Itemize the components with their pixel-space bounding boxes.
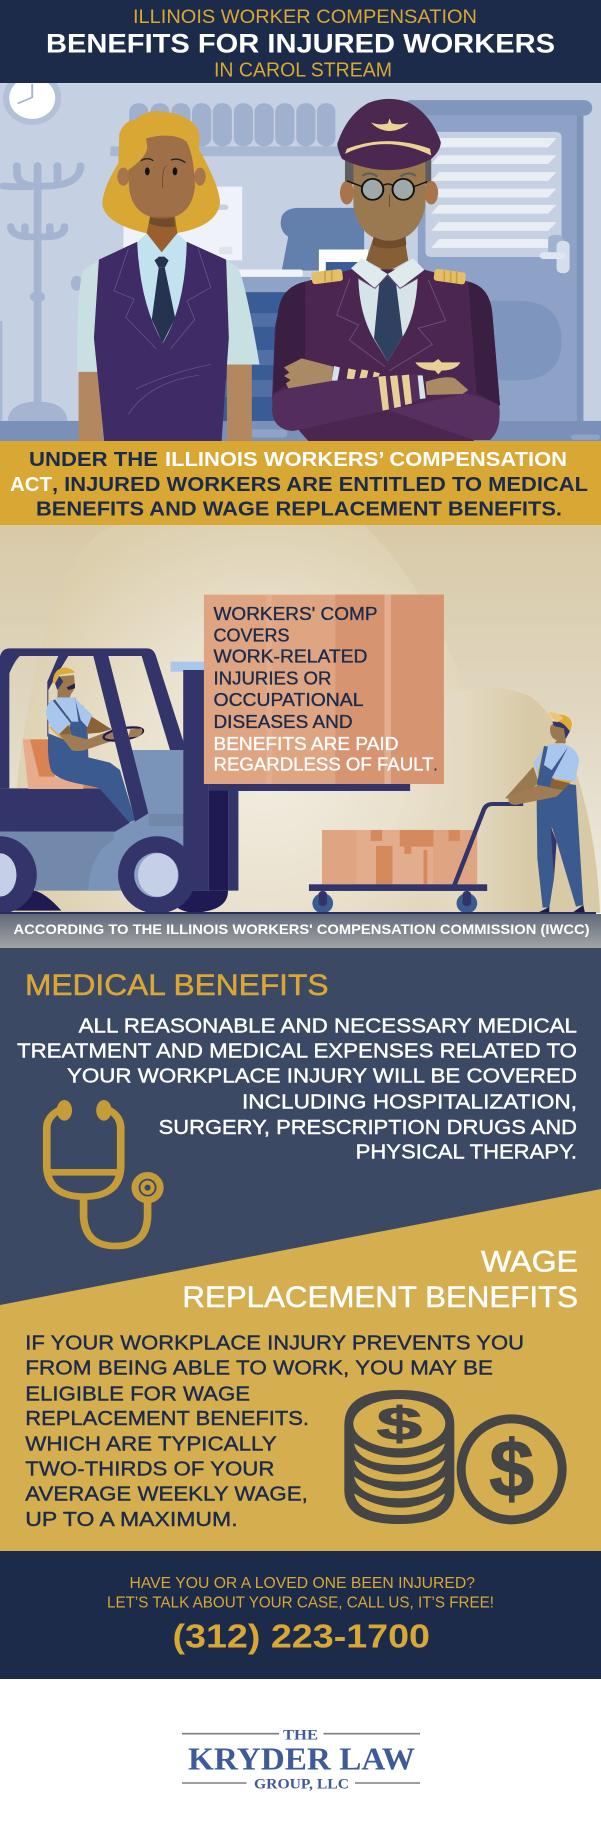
forklift <box>0 662 410 914</box>
phone number: (312) 223-1700 <box>172 1618 430 1655</box>
wage benefits text: IF YOUR WORKPLACE INJURY PREVENTS YOU <box>25 1332 524 1354</box>
copier and cabinet <box>220 208 368 422</box>
source bar <box>0 914 601 948</box>
header band <box>0 0 601 83</box>
intro text: BENEFITS AND WAGE REPLACEMENT BENEFITS. <box>36 498 562 520</box>
figure: flight attendant head <box>102 111 220 257</box>
illustration: office background <box>0 71 601 442</box>
wage benefits text: UP TO A MAXIMUM. <box>25 1509 238 1531</box>
floor line <box>0 912 596 914</box>
wage benefits text: ELIGIBLE FOR WAGE <box>25 1383 250 1405</box>
figure: flight attendant body <box>77 242 259 442</box>
door with blinds <box>402 100 592 421</box>
box on forks <box>204 595 444 784</box>
logo: The Kryder Law Group: THE <box>283 1727 318 1743</box>
icon: coins: $ <box>377 1398 422 1450</box>
call to action text: HAVE YOU OR A LOVED ONE BEEN INJURED? <box>130 1575 475 1592</box>
heading: medical benefits: MEDICAL BENEFITS <box>25 969 328 1002</box>
forklift cab with driver <box>0 648 184 832</box>
callout text on box: WORKERS' COMP <box>214 604 378 624</box>
logo: The Kryder Law Group: KRYDER LAW <box>188 1740 415 1776</box>
medical benefits text: YOUR WORKPLACE INJURY WILL BE COVERED <box>67 1066 577 1088</box>
call to action text <box>107 1575 494 1611</box>
figure: cart worker <box>505 712 585 913</box>
icon: coins: $ <box>489 1424 534 1513</box>
callout text on box: REGARDLESS OF FAULT <box>214 755 434 775</box>
callout text on box <box>214 604 438 775</box>
call to action text: LET’S TALK ABOUT YOUR CASE, CALL US, IT’S FREE! <box>107 1594 494 1611</box>
main title: BENEFITS FOR INJURED WORKERS <box>46 28 555 58</box>
wage benefits text: WHICH ARE TYPICALLY <box>25 1433 277 1455</box>
header location: IN CAROL STREAM <box>214 59 392 81</box>
wage benefits text: REPLACEMENT BENEFITS. <box>25 1408 309 1430</box>
heading: wage replacement benefits: REPLACEMENT BENEFITS <box>182 1281 578 1314</box>
wage benefits text: TWO-THIRDS OF YOUR <box>25 1458 274 1480</box>
icon: coins <box>344 1390 567 1524</box>
intro band <box>0 441 601 525</box>
medical benefits text: TREATMENT AND MEDICAL EXPENSES RELATED TO <box>17 1041 577 1063</box>
panel: medical benefits <box>0 948 601 1308</box>
medical benefits text <box>17 1016 577 1164</box>
medical benefits text: PHYSICAL THERAPY. <box>356 1142 577 1164</box>
medical benefits text: ALL REASONABLE AND NECESSARY MEDICAL <box>79 1016 577 1038</box>
intro text <box>10 448 588 520</box>
medical benefits text: SURGERY, PRESCRIPTION DRUGS AND <box>159 1117 577 1139</box>
medical benefits text: INCLUDING HOSPITALIZATION, <box>242 1091 577 1113</box>
box cart <box>309 804 523 913</box>
intro text: ACT <box>10 473 52 496</box>
wage benefits text: AVERAGE WEEKLY WAGE, <box>25 1483 308 1505</box>
source text: ACCORDING TO THE ILLINOIS WORKERS' COMPENSATION COMMISSION (IWCC) <box>14 921 590 937</box>
intro text: UNDER THE <box>29 448 158 471</box>
callout text on box: BENEFITS ARE PAID <box>214 734 398 754</box>
callout text on box: COVERS <box>214 625 290 645</box>
callout text on box: WORK-RELATED <box>214 647 368 667</box>
illustration: warehouse background <box>0 525 601 913</box>
callout text on box: INJURIES OR <box>214 669 332 689</box>
callout text on box: . <box>433 755 438 775</box>
heading: wage replacement benefits <box>182 1246 578 1314</box>
panel: wage replacement benefits <box>0 1189 601 1551</box>
intro text: , INJURED WORKERS ARE ENTITLED TO MEDICAL <box>52 473 588 496</box>
paper on wall <box>123 187 242 260</box>
icon: stethoscope <box>47 1100 164 1246</box>
callout text on box: DISEASES AND <box>214 712 353 732</box>
intro text: ILLINOIS WORKERS’ COMPENSATION <box>165 448 567 471</box>
footer call to action <box>0 1551 601 1679</box>
logo: The Kryder Law Group: GROUP, LLC <box>254 1776 349 1792</box>
callout text on box: OCCUPATIONAL <box>214 690 364 710</box>
icon: wall clock <box>3 71 61 125</box>
header kicker: ILLINOIS WORKER COMPENSATION <box>133 7 477 28</box>
shelf with binders <box>110 103 425 156</box>
heading: wage replacement benefits: WAGE <box>481 1246 578 1279</box>
wage benefits text: FROM BEING ABLE TO WORK, YOU MAY BE <box>25 1357 493 1379</box>
coat rack <box>3 166 80 421</box>
floor <box>0 276 601 442</box>
logo: The Kryder Law Group <box>182 1727 420 1792</box>
figure: pilot head <box>337 99 441 272</box>
figure: pilot uniform <box>272 258 500 441</box>
wage benefits text <box>25 1332 524 1531</box>
